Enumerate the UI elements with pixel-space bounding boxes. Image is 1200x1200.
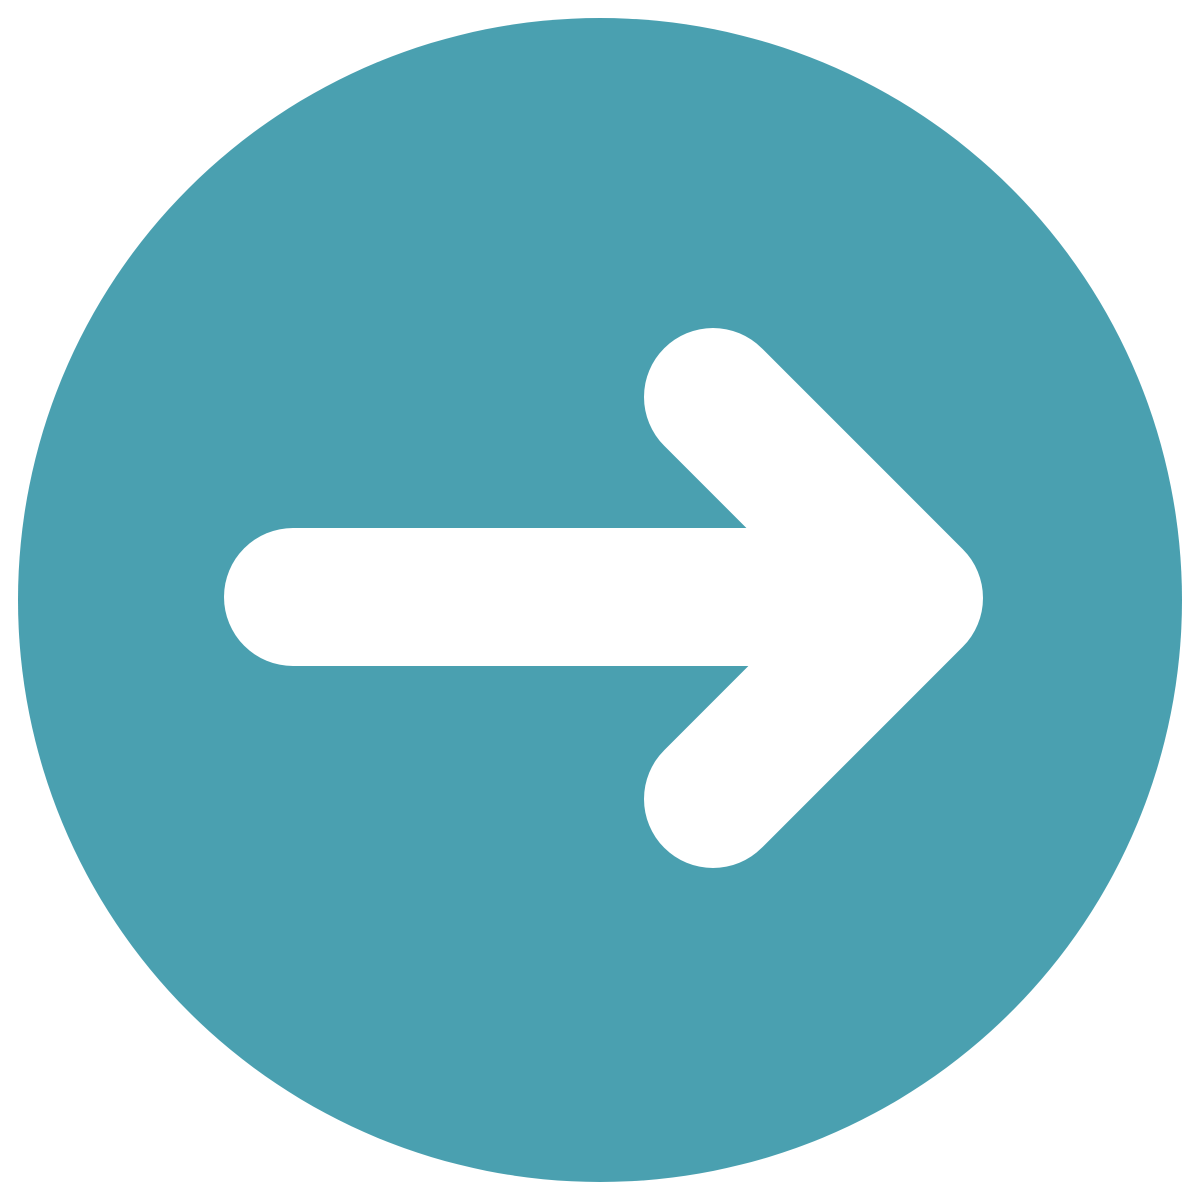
arrow: right-pointing white arrow (293, 397, 914, 799)
